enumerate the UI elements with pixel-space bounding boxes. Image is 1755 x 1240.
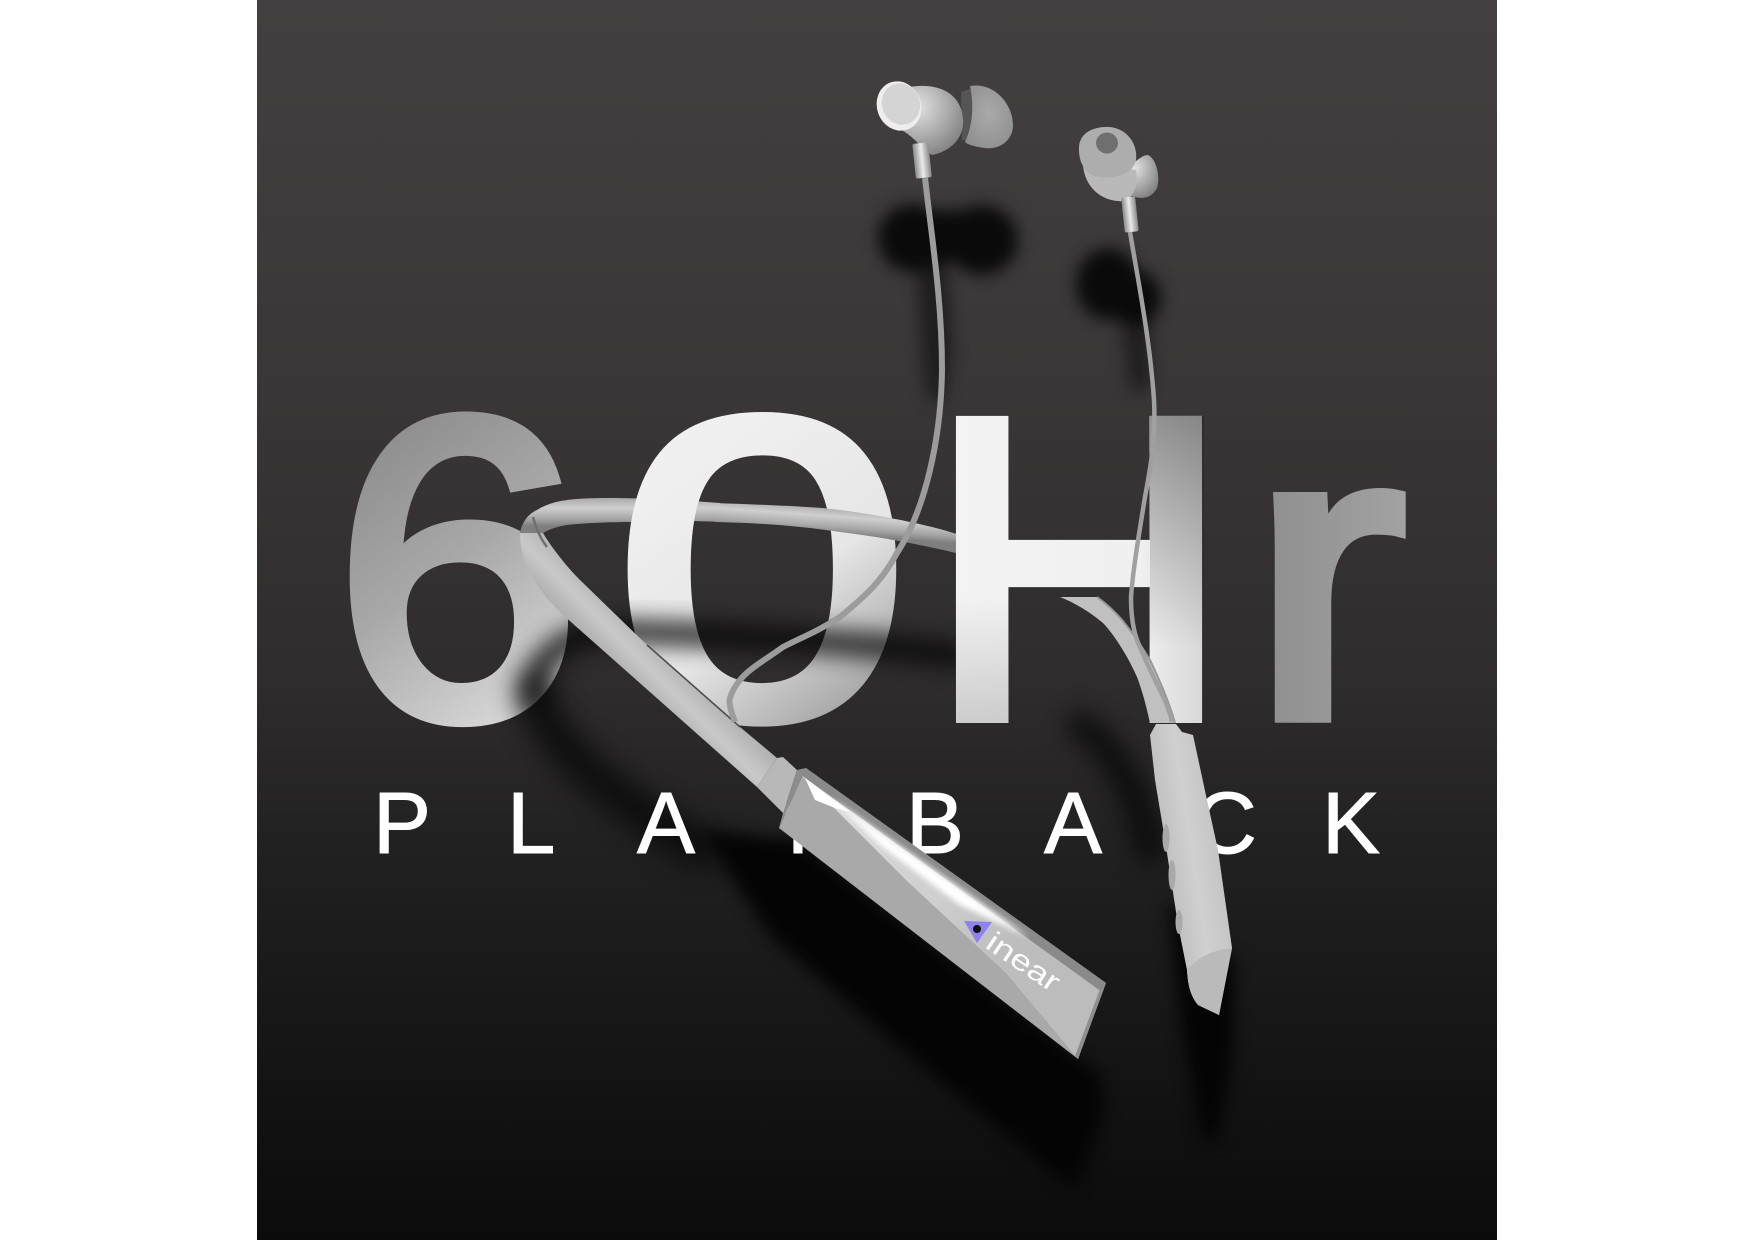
PLAYBACK subtitle: L <box>507 775 555 872</box>
PLAYBACK subtitle: B <box>906 775 964 872</box>
neckband left arm <box>520 517 777 787</box>
left earphone wire <box>729 178 942 722</box>
neckband right arm <box>1060 597 1175 723</box>
PLAYBACK subtitle <box>373 775 1380 872</box>
neckband and module cast shadows <box>534 632 1150 850</box>
H stem shading <box>955 416 1204 723</box>
big numeral 0: 0 <box>615 331 909 807</box>
right control module <box>1150 724 1232 1015</box>
logo triangle <box>964 921 992 943</box>
PLAYBACK subtitle: A <box>637 775 695 872</box>
right earbud <box>1079 127 1158 233</box>
logo wordmark: inear <box>980 926 1066 999</box>
right earphone wire <box>1130 232 1172 722</box>
PLAYBACK subtitle: P <box>373 775 431 872</box>
big numeral 6: 6 <box>335 330 580 806</box>
control buttons <box>1162 824 1182 934</box>
big letter r: r <box>1250 344 1406 804</box>
PLAYBACK subtitle: K <box>1322 775 1380 872</box>
dark gradient background panel <box>257 0 1497 1240</box>
left control module <box>757 757 1106 1059</box>
left earbud <box>870 75 1013 179</box>
PLAYBACK subtitle: Y <box>769 775 827 872</box>
big letter H: H <box>929 332 1229 807</box>
module cast shadows <box>700 830 1235 1190</box>
neckband arc left <box>520 498 720 533</box>
PLAYBACK subtitle: A <box>1044 775 1102 872</box>
PLAYBACK subtitle: C <box>1194 775 1257 872</box>
neckband arc right <box>715 503 960 554</box>
earbud cast shadows <box>878 204 1161 400</box>
